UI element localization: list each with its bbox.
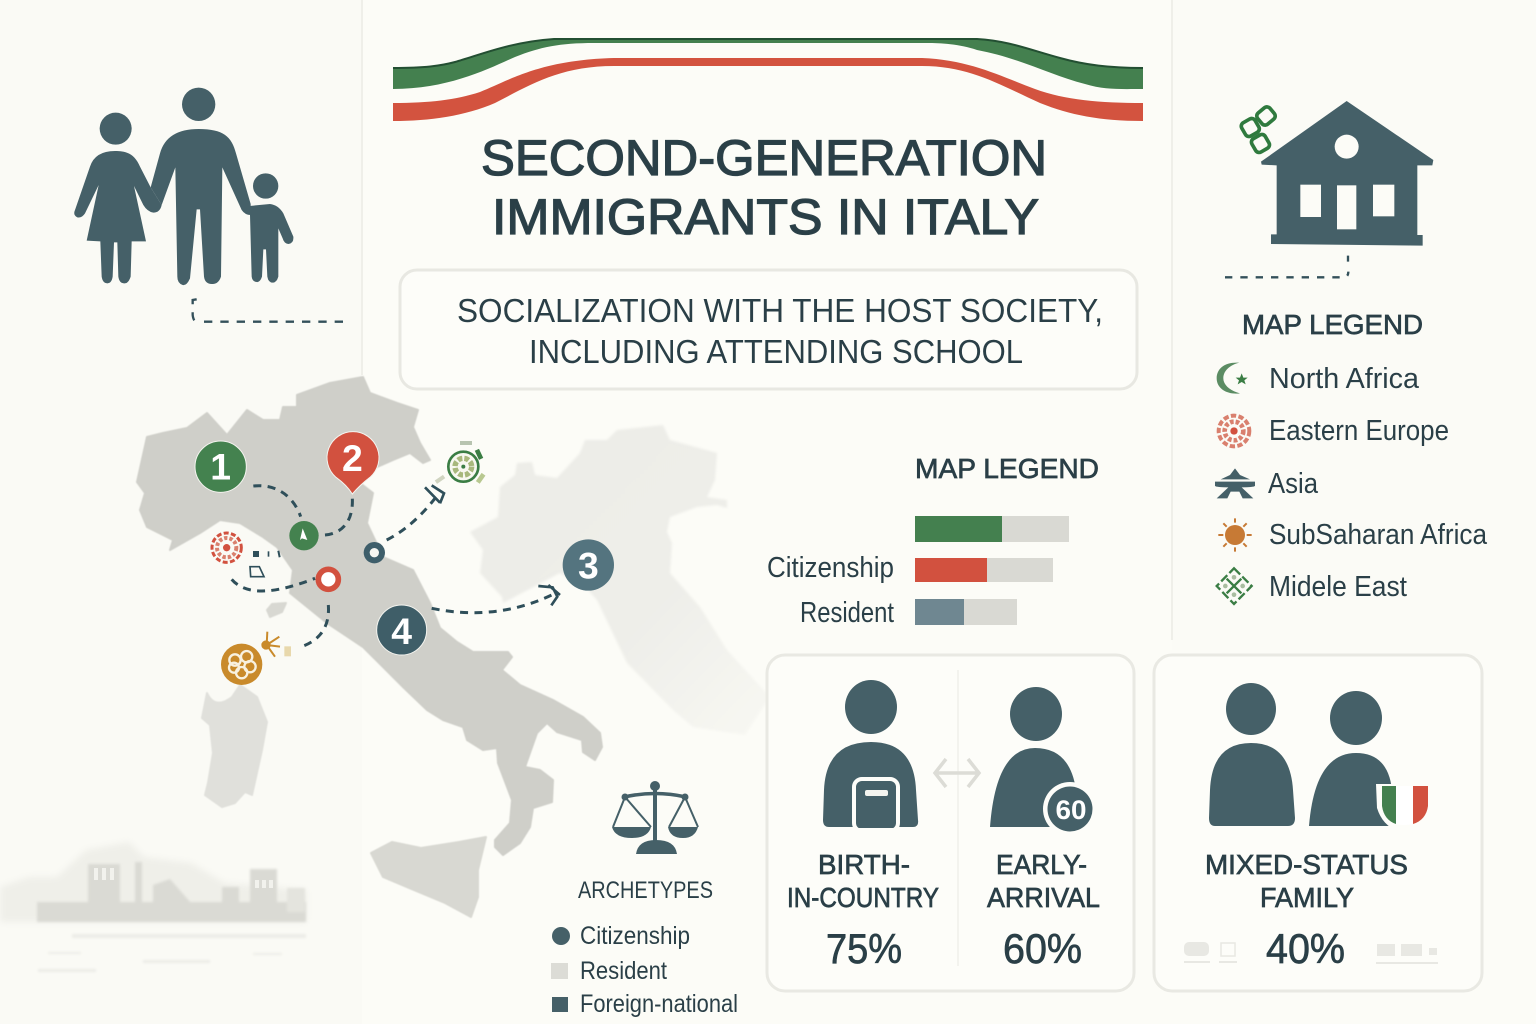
Elba island xyxy=(267,603,286,617)
marker 2 xyxy=(327,432,379,494)
map routes and markers xyxy=(195,432,614,685)
archetypes legend: Foreign-national xyxy=(580,990,738,1018)
center map legend with bars: MAP LEGEND xyxy=(915,453,1099,484)
icon: eastern Europe rosette xyxy=(1219,416,1249,446)
dashed migration routes xyxy=(232,486,552,647)
subtitle box: SOCIALIZATION WITH THE HOST SOCIETY, xyxy=(457,292,1103,329)
person with book xyxy=(823,680,919,834)
label: birth-in-country xyxy=(787,849,939,913)
map of Italy xyxy=(137,377,602,917)
archetypes legend xyxy=(551,781,738,1018)
archetypes legend: Citizenship xyxy=(580,922,690,950)
icon: family xyxy=(74,88,350,322)
value: 75%: 75% xyxy=(826,925,902,972)
green wheel icon xyxy=(435,441,485,484)
faint decorative icons xyxy=(1184,942,1438,964)
person xyxy=(1209,683,1295,826)
bar: resident xyxy=(915,599,1017,625)
small blue stop xyxy=(364,542,385,563)
archetypes legend: ARCHETYPES xyxy=(578,877,713,904)
person with 60 badge xyxy=(990,687,1097,836)
Sardinia xyxy=(202,685,267,807)
icon: scales xyxy=(612,781,698,854)
marker 4: 4 xyxy=(391,610,412,652)
right map legend xyxy=(1215,309,1488,604)
icon: sun xyxy=(1218,518,1252,552)
marker 1: 1 xyxy=(210,445,231,487)
title: SECOND-GENERATION xyxy=(481,130,1047,186)
Sicily xyxy=(371,837,486,917)
arrow: comparison xyxy=(935,759,979,787)
card: birth-in-country and early-arrival xyxy=(767,655,1134,991)
label: mixed-status family: MIXED-STATUS xyxy=(1205,849,1408,880)
right map legend: SubSaharan Africa xyxy=(1269,519,1488,551)
marker 3: 3 xyxy=(578,544,599,586)
label: early-arrival: EARLY- xyxy=(996,849,1087,880)
background map: Balkan landmass xyxy=(470,425,770,735)
marker 4 xyxy=(377,605,427,655)
label: birth-in-country: IN-COUNTRY xyxy=(787,882,939,913)
icon: star xyxy=(1236,373,1248,384)
right map legend: North Africa xyxy=(1269,363,1420,395)
pale tag xyxy=(284,646,291,656)
right map legend: Midele East xyxy=(1269,571,1407,603)
label: mixed-status family: FAMILY xyxy=(1260,882,1354,913)
faded city skyline xyxy=(0,842,306,972)
orange flower stop xyxy=(221,644,262,685)
subtitle box: INCLUDING ATTENDING SCHOOL xyxy=(529,333,1023,370)
icon: Asia pagoda xyxy=(1215,468,1255,498)
icon: crescent xyxy=(1217,363,1240,394)
person with 60 badge: 60 xyxy=(1056,795,1086,825)
value: 60%: 60% xyxy=(1003,925,1082,972)
small route fragments xyxy=(250,551,281,577)
label: birth-in-country: BIRTH- xyxy=(818,849,910,880)
marker 2: 2 xyxy=(342,437,363,479)
icon: Middle East diamond xyxy=(1217,568,1252,604)
center map legend with bars: Citizenship xyxy=(767,552,894,584)
center map legend with bars xyxy=(767,453,1099,629)
marker 3 xyxy=(563,539,614,591)
value: 40%: 40% xyxy=(1266,925,1345,972)
route arrowheads xyxy=(425,485,560,605)
red ring stop xyxy=(318,569,338,589)
title xyxy=(481,130,1047,245)
center map legend with bars: Resident xyxy=(800,597,894,629)
green leaf shapes xyxy=(1240,105,1277,154)
label: early-arrival xyxy=(987,849,1100,913)
marker 1 xyxy=(195,441,246,492)
orange burst xyxy=(262,632,280,657)
subtitle box xyxy=(400,270,1137,389)
label: mixed-status family xyxy=(1205,849,1408,913)
small green stop xyxy=(289,521,319,550)
title: IMMIGRANTS IN ITALY xyxy=(492,189,1039,245)
right map legend: Asia xyxy=(1268,468,1319,500)
archetypes legend: Resident xyxy=(580,957,667,985)
icon: house xyxy=(1225,101,1433,277)
right map legend: Eastern Europe xyxy=(1269,415,1449,447)
bar: green xyxy=(915,516,1069,542)
bar: citizenship xyxy=(915,558,1053,582)
card: mixed-status family xyxy=(1154,655,1482,991)
person with Italian shield xyxy=(1309,691,1432,832)
red rosette icon xyxy=(212,533,241,562)
label: early-arrival: ARRIVAL xyxy=(987,882,1100,913)
right map legend: MAP LEGEND xyxy=(1242,309,1423,340)
decorative flag wave xyxy=(393,39,1143,121)
